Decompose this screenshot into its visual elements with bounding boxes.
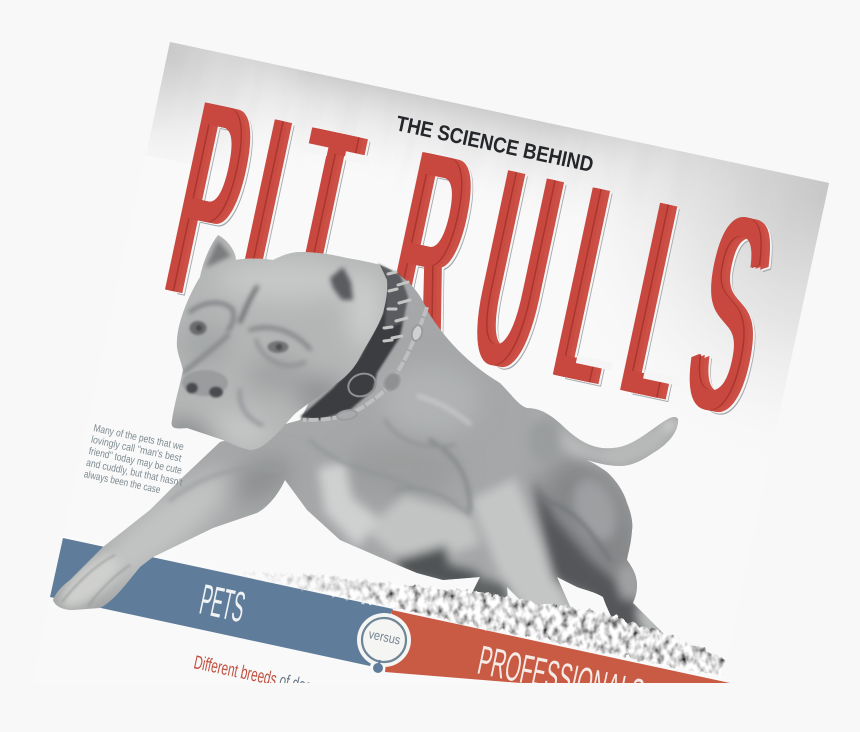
title: PIT BULLS: L	[601, 142, 711, 456]
bar: PROFESSIONALS	[385, 610, 730, 683]
dog: head	[172, 235, 388, 450]
poster background	[150, 42, 829, 376]
bar: PETS: PETS	[196, 576, 249, 632]
collar strap	[300, 264, 408, 420]
intro paragraph: lovingly call "man's best	[90, 435, 182, 465]
title: PIT BULLS	[146, 42, 785, 471]
bar: PETS	[50, 538, 393, 666]
grass	[240, 572, 725, 677]
intro paragraph: Many of the pets that we	[92, 423, 185, 453]
pets intro text: Different breeds of dogs were	[192, 652, 348, 705]
body broad shading	[90, 372, 635, 594]
main scene	[50, 116, 730, 683]
versus badge: versus	[367, 626, 402, 648]
nose and mouth	[182, 370, 228, 398]
eyes	[190, 321, 288, 353]
title: PIT BULLS: U	[449, 110, 573, 426]
intro paragraph: friend" today may be cute	[88, 446, 183, 477]
chest, leg and hind tones	[58, 417, 678, 630]
title: PIT BULLS: R	[363, 91, 487, 408]
intro paragraph: and cuddly, but that hasn't	[85, 458, 183, 489]
collar spikes	[384, 272, 410, 341]
versus badge	[357, 613, 411, 673]
muscle lines	[170, 396, 610, 560]
dog: body	[40, 240, 690, 650]
title: PIT BULLS: T	[258, 68, 373, 382]
wrinkles	[184, 287, 310, 425]
head tones	[158, 258, 383, 452]
title: PIT BULLS: S	[666, 155, 785, 471]
paw toes	[62, 555, 130, 606]
title: PIT BULLS: P	[146, 42, 265, 357]
heading: THE SCIENCE BEHIND: THE SCIENCE BEHIND	[394, 111, 596, 177]
intro paragraph	[83, 423, 185, 496]
title: PIT BULLS: L	[534, 127, 644, 440]
intro paragraph: always been the case	[83, 469, 162, 496]
title: PIT BULLS: I	[215, 58, 303, 367]
collar chain	[303, 307, 427, 421]
ears	[205, 240, 353, 300]
dog: collar	[300, 264, 427, 421]
